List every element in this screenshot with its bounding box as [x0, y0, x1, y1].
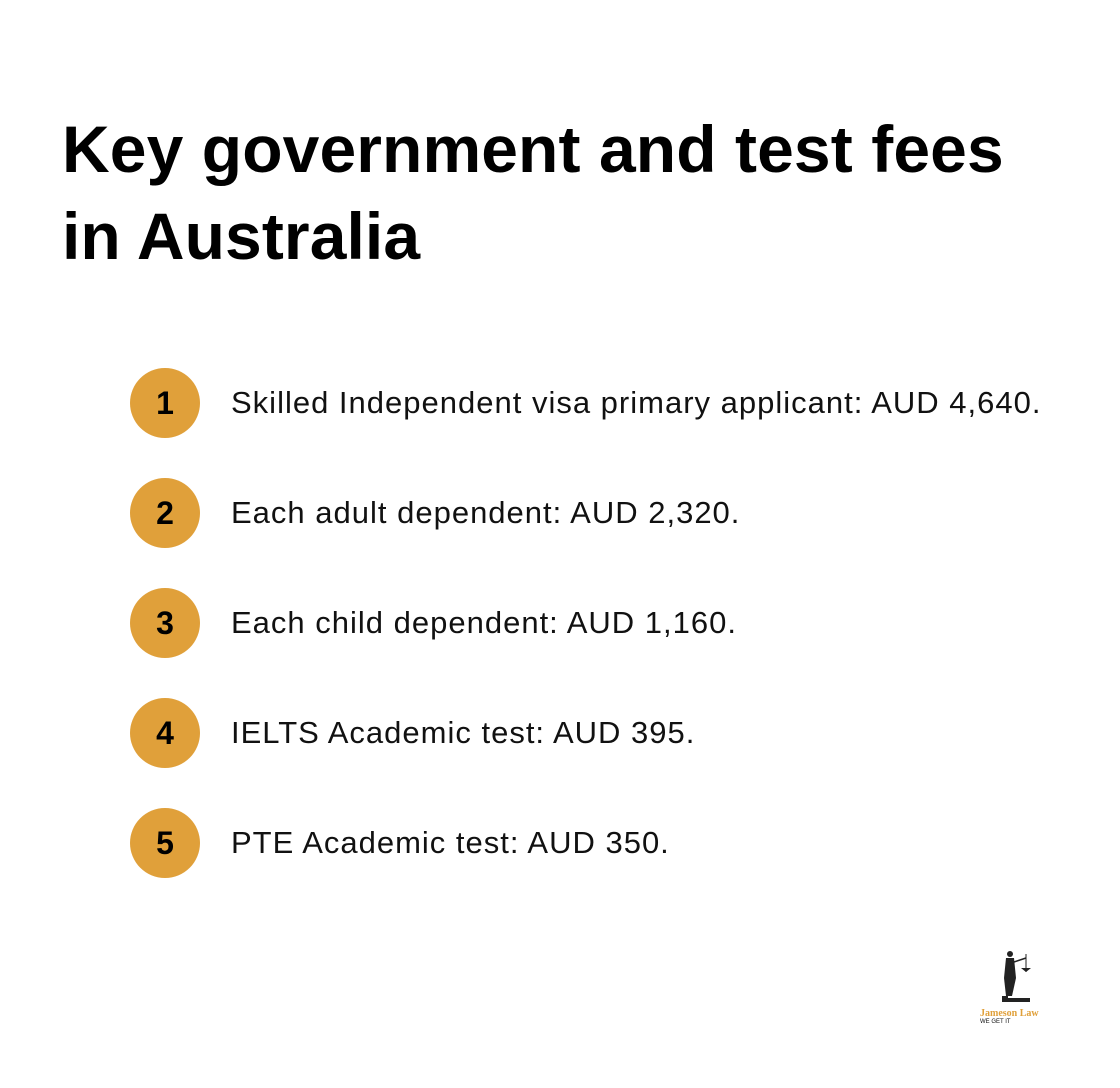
- item 4: IELTS Academic test: AUD 395.: [231, 715, 695, 750]
- item 2: [130, 478, 740, 548]
- logo: [980, 951, 1039, 1025]
- item 5: PTE Academic test: AUD 350.: [231, 825, 670, 860]
- item 1: 1: [156, 385, 174, 421]
- item 4: 4: [156, 715, 174, 751]
- title: in Australia: [62, 199, 420, 273]
- logo: Jameson Law: [980, 1008, 1039, 1019]
- item 1: [130, 368, 1042, 438]
- item 3: 3: [156, 605, 174, 641]
- item 3: [130, 588, 737, 658]
- title: [62, 112, 1004, 273]
- item 5: 5: [156, 825, 174, 861]
- title: Key government and test fees: [62, 112, 1004, 186]
- item 2: 2: [156, 495, 174, 531]
- item 3: Each child dependent: AUD 1,160.: [231, 605, 737, 640]
- item 4: [130, 698, 695, 768]
- logo: WE GET IT: [980, 1019, 1011, 1025]
- item 5: [130, 808, 670, 878]
- item 2: Each adult dependent: AUD 2,320.: [231, 495, 740, 530]
- item 1: Skilled Independent visa primary applicant: AUD 4,640.: [231, 385, 1042, 420]
